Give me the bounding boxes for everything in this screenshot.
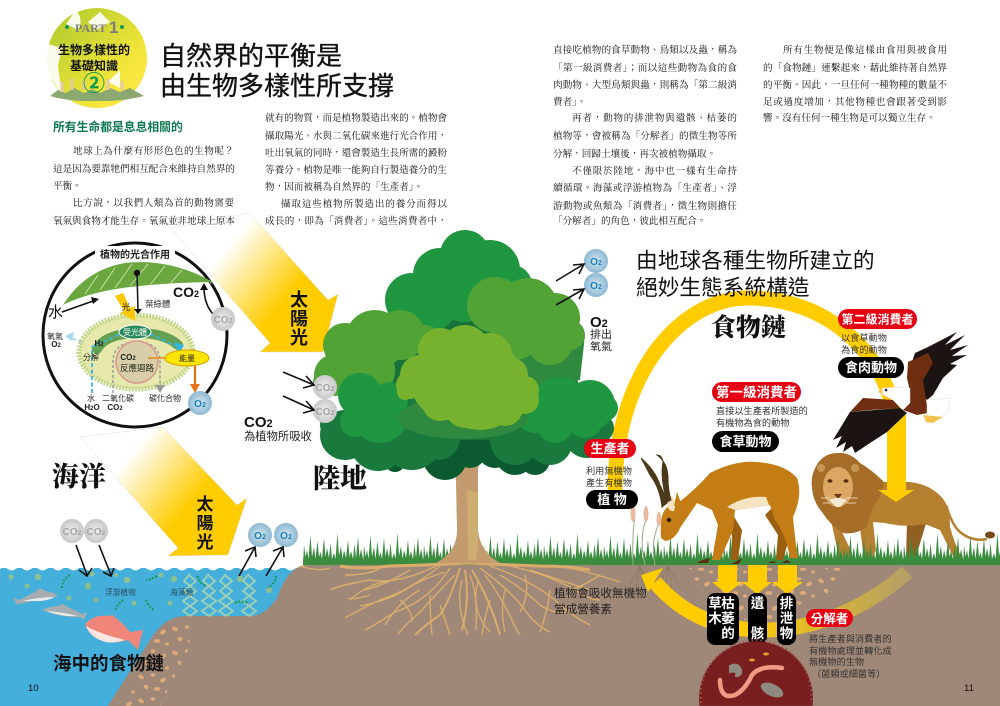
text column 1: 平衡。 xyxy=(53,180,82,192)
description: 無機物的生物 xyxy=(809,656,864,667)
eagle xyxy=(833,332,968,453)
tree trunk xyxy=(436,433,500,563)
co2 absorption bubbles and arrows: CO2 xyxy=(316,383,335,394)
lower left foliage xyxy=(320,382,460,471)
co2 caption: CO2 xyxy=(244,414,273,431)
text column 4: 的「食物鏈」連繫起來，藉此維持著自然界 xyxy=(763,62,947,74)
head and tail xyxy=(878,387,950,423)
seaweed label: 海藻類 xyxy=(170,587,193,597)
heading xyxy=(95,246,175,261)
co2 caption: 為植物所吸收 xyxy=(244,429,312,443)
text column 1: 氧氣與食物才能生存。氧氣並非地球上原本 xyxy=(53,215,235,227)
withered plants pill: 草 xyxy=(708,596,722,611)
page number left: 10 xyxy=(28,683,39,694)
ocean food chain caption: 海中的食物鏈 xyxy=(53,653,165,674)
bug xyxy=(759,679,785,701)
text column 3 xyxy=(553,44,737,227)
light arrow: 光 xyxy=(122,302,131,312)
labels: CO2 xyxy=(173,284,199,300)
o2 release bubbles and arrows: O2 xyxy=(590,281,602,292)
roots caption: 當成營養素 xyxy=(554,602,612,616)
specks xyxy=(749,658,755,662)
plankton label: 浮游植物 xyxy=(105,587,136,597)
co2 bubble: CO2 xyxy=(214,315,233,326)
red badge: 分解者 xyxy=(811,611,848,626)
tree roots xyxy=(300,563,620,635)
carbon dioxide intake arrow xyxy=(200,283,214,315)
leaf xyxy=(63,262,213,305)
o2 caption: 氧氣 xyxy=(590,339,612,353)
labels: 分解 xyxy=(83,352,99,362)
reaction cycle: 反應迴路 xyxy=(120,363,154,373)
badge label: part 1: PART xyxy=(75,21,106,35)
sea oxygen bubbles: O2 xyxy=(280,531,292,542)
text column 2: 等養分。植物是唯一能夠自行製造養分的生 xyxy=(265,164,447,176)
photoreceptor xyxy=(119,325,151,339)
decomposer label xyxy=(806,609,892,679)
excrement pill: 排 xyxy=(780,595,794,611)
food chain heading: 食物鏈 xyxy=(711,313,786,342)
labels: 二氧化碳 xyxy=(102,393,134,403)
withered plants pill: 萎 xyxy=(721,610,735,626)
red badge: 第一級消費者 xyxy=(716,384,797,400)
badge label: part 1 xyxy=(65,18,124,37)
text column 1 xyxy=(53,145,235,227)
co2 bubble xyxy=(211,307,235,331)
photosynthesis diagram xyxy=(43,243,235,427)
label: sunlight: 太 xyxy=(290,290,308,310)
roots caption xyxy=(554,586,647,616)
black badge: 食草動物 xyxy=(719,434,772,449)
text column 3: 續循環。海藻或浮游植物為「生產者」、浮 xyxy=(553,182,737,194)
description: 以食草動物 xyxy=(841,332,887,343)
roots caption: 植物會吸收無機物 xyxy=(554,586,647,600)
red fish xyxy=(85,615,143,650)
description: 直接以生產者所製造的 xyxy=(716,405,808,416)
subheading: 所有生命都是息息相關的 xyxy=(53,120,183,134)
o2 bubble: O2 xyxy=(194,399,206,410)
text column 3: 不僅限於陸地，海中也一樣有生命持 xyxy=(572,165,737,177)
label: sunlight: 光 xyxy=(290,328,308,348)
black badge: 植 物 xyxy=(597,492,627,507)
second consumer label xyxy=(838,309,917,378)
sunlight arrow: land xyxy=(170,213,338,352)
text column 4: 的平衡。因此，一旦任何一種物種的數量不 xyxy=(763,79,947,91)
label: sunlight xyxy=(196,495,214,552)
top foliage xyxy=(385,230,532,330)
text column 1: 這是因為要靠牠們相互配合來維持自然界的 xyxy=(53,163,235,175)
soil organisms circle xyxy=(699,640,813,706)
text column 3: 植物等，會被稱為「分解者」的微生物等所 xyxy=(553,130,737,142)
sea oxygen bubbles: O2 xyxy=(254,531,266,542)
page number right: 11 xyxy=(964,683,974,694)
lower right foliage xyxy=(490,395,614,465)
description xyxy=(586,465,632,488)
co2 absorption bubbles and arrows xyxy=(283,372,337,423)
badge number: ② xyxy=(83,71,105,96)
plant with plumes xyxy=(630,506,677,588)
o2 caption: 排出 xyxy=(590,327,612,341)
ecosystem heading xyxy=(636,248,875,300)
plankton xyxy=(8,572,276,610)
reaction cycle: CO2 xyxy=(120,353,136,362)
soil pebbles right xyxy=(683,568,845,620)
labels: 葉綠體 xyxy=(145,299,171,309)
down arrows xyxy=(712,565,803,594)
ocean heading: 海洋 xyxy=(52,462,106,492)
withered plants pill: 的 xyxy=(721,625,735,641)
dark foliage xyxy=(385,432,550,480)
centre foliage xyxy=(396,325,539,430)
labels: H2O xyxy=(84,403,100,412)
part badge xyxy=(42,8,147,108)
description: 產生有機物 xyxy=(586,477,632,488)
water path xyxy=(65,332,184,393)
mid foliage xyxy=(338,373,618,443)
description: 利用無機物 xyxy=(586,465,632,476)
text column 3: 肉動物、大型鳥類與蟲，則稱為「第二級消 xyxy=(553,79,737,91)
text column 2: 攝取陽光、水與二氧化碳來進行光合作用， xyxy=(265,130,447,142)
text column 2: 攝取這些植物所製造出的養分而得以 xyxy=(281,198,447,210)
text column 2 xyxy=(265,112,447,227)
outer circle xyxy=(43,243,227,427)
land heading: 陸地 xyxy=(313,464,367,494)
o2 release bubbles and arrows xyxy=(556,249,608,305)
text column 4: 所有生物便是像這樣由食用與被食用 xyxy=(783,44,947,56)
grub xyxy=(730,665,741,676)
antelope xyxy=(641,455,799,564)
soil pebbles left xyxy=(122,625,192,706)
description: （菌類或細菌等） xyxy=(812,668,886,679)
land and grass xyxy=(303,529,1000,566)
co2 absorption bubbles and arrows: CO2 xyxy=(316,407,335,418)
light arrow xyxy=(115,293,135,321)
labels: H2 xyxy=(94,339,104,348)
energy: 能量 xyxy=(179,353,195,363)
grey fish 2 xyxy=(42,604,87,620)
text column 4: 響。沒有任何一種生物是可以獨立生存。 xyxy=(763,112,936,124)
remains pill: 骸 xyxy=(751,625,765,641)
withered plants pill xyxy=(707,593,739,645)
co2 caption xyxy=(244,414,312,443)
label: sunlight: 太 xyxy=(196,495,214,514)
black badge: 食肉動物 xyxy=(845,360,897,375)
o2 bubble xyxy=(188,391,212,415)
text column 2: 物，因而被稱為自然界的「生產者」。 xyxy=(265,181,423,193)
text column 3: 「分解者」的角色，彼此相互配合。 xyxy=(553,215,706,227)
chloroplast xyxy=(79,315,193,389)
food chain arc xyxy=(615,298,914,502)
sea carbon dioxide bubbles: CO2 xyxy=(87,527,106,538)
label: sunlight: 陽 xyxy=(290,309,308,329)
red badge: 第二級消費者 xyxy=(841,312,914,326)
sea carbon dioxide bubbles: CO2 xyxy=(63,527,82,538)
text column 1: 比方說，以我們人類為首的動物需要 xyxy=(73,197,234,209)
lower wing xyxy=(833,408,907,453)
left foliage xyxy=(313,310,440,400)
label: sunlight xyxy=(290,290,308,348)
labels: 碳化合物 xyxy=(149,393,181,403)
text column 2: 吐出氧氣的同時，還會製造生長所需的澱粉 xyxy=(265,147,447,159)
labels: 水 xyxy=(87,393,95,403)
tree xyxy=(300,230,620,635)
ecosystem heading: 絕妙生態系統構造 xyxy=(636,275,810,300)
labels: O2 xyxy=(51,340,61,349)
reaction cycle xyxy=(113,341,165,393)
chloroplast pointer xyxy=(134,270,142,314)
text column 3: 分解，回歸土壤後，再次被植物攝取。 xyxy=(553,148,716,160)
description xyxy=(809,633,892,679)
description xyxy=(841,332,887,355)
description: 為食的動物 xyxy=(841,344,887,355)
title: 由生物多樣性所支撐 xyxy=(160,71,394,101)
lion xyxy=(812,453,995,562)
decomposition arc xyxy=(641,568,907,630)
under-centre foliage xyxy=(398,397,528,439)
label: sunlight: 光 xyxy=(196,533,214,552)
photoreceptor: 受光體 xyxy=(123,327,147,337)
title: 自然界的平衡是 xyxy=(160,41,342,71)
remains pill xyxy=(748,593,767,645)
text column 3: 直接吃植物的食草動物、鳥類以及蟲，稱為 xyxy=(553,44,737,56)
worm xyxy=(720,667,782,696)
right foliage xyxy=(467,277,585,388)
text column 2: 就有的物質，而是植物製造出來的。植物會 xyxy=(265,112,447,124)
sea carbon dioxide bubbles xyxy=(60,519,114,576)
description: 將生產者與消費者的 xyxy=(809,633,892,644)
excrement pill: 物 xyxy=(780,625,794,641)
badge label: part 1: 1 xyxy=(109,18,118,37)
text column 2: 成長的，即為「消費者」。這些消費者中， xyxy=(265,215,447,227)
badge text line 2: 基礎知識 xyxy=(70,58,118,73)
text column 3: 再者，動物的排泄物與遺骸、枯萎的 xyxy=(572,112,737,124)
o2 caption: O2 xyxy=(590,314,608,331)
seaweed xyxy=(183,574,256,616)
excrement pill: 泄 xyxy=(780,611,794,626)
grey fish 1 xyxy=(13,588,58,605)
description: 有機物為食的動物 xyxy=(716,417,790,428)
labels: CO2 xyxy=(107,403,123,412)
description xyxy=(716,405,808,428)
text column 3: 「第一級消費者」；而以這些動物為食的食 xyxy=(553,62,737,74)
water arrow xyxy=(62,297,99,312)
text column 1: 地球上為什麼有形形色色的生物呢？ xyxy=(73,145,234,157)
sea xyxy=(0,565,305,706)
text column 4: 足或過度增加，其他物種也會跟著受到影 xyxy=(763,96,947,108)
labels xyxy=(47,284,199,412)
sea oxygen bubbles xyxy=(239,523,298,576)
energy xyxy=(148,350,209,393)
text column 3: 費者」。 xyxy=(553,96,587,108)
o2 caption xyxy=(590,314,612,353)
upper wing xyxy=(907,332,968,400)
text column 4 xyxy=(763,44,947,124)
sunlight arrow: ocean xyxy=(80,427,247,556)
excrement pill xyxy=(777,593,796,645)
withered plants pill: 枯 xyxy=(721,595,735,611)
labels: 水 xyxy=(48,304,63,321)
badge text: 生物多樣性的 xyxy=(58,42,130,57)
description: 有機物處理並轉化成 xyxy=(809,645,892,656)
withered plants pill: 木 xyxy=(708,610,722,626)
o2 release bubbles and arrows: O2 xyxy=(590,257,602,268)
heading: 植物的光合作用 xyxy=(100,248,170,261)
ecosystem heading: 由地球各種生物所建立的 xyxy=(636,248,875,273)
producer label xyxy=(584,439,638,509)
first consumer label xyxy=(712,382,808,452)
title xyxy=(160,41,394,101)
canopy backing xyxy=(350,300,585,440)
text column 3: 游動物或魚類為「消費者」，微生物則擔任 xyxy=(553,200,737,212)
remains pill: 遺 xyxy=(751,595,765,611)
soil xyxy=(108,565,1000,706)
red badge: 生產者 xyxy=(590,441,630,456)
labels: 氧氣 xyxy=(47,331,63,341)
label: sunlight: 陽 xyxy=(196,514,214,533)
